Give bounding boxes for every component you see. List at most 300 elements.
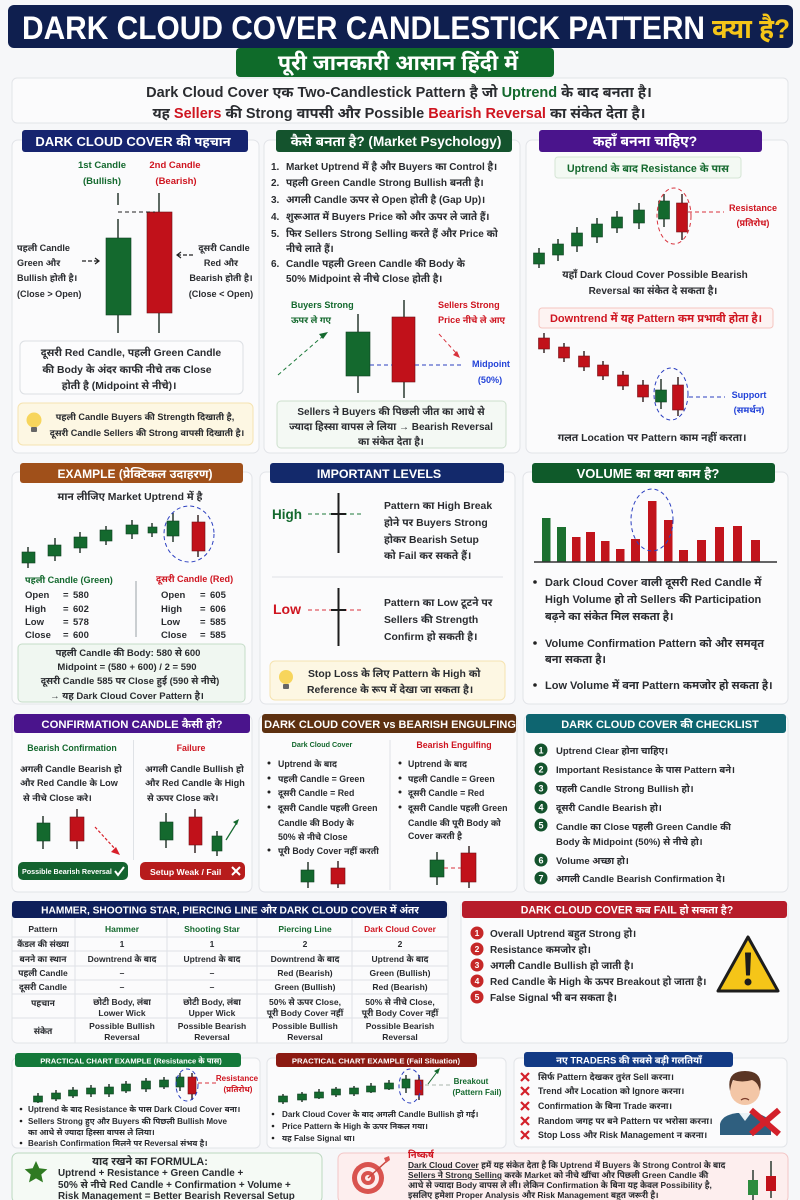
resistance label — [729, 203, 777, 228]
mistakes list: Stop Loss और Risk Management न करना। — [538, 1129, 707, 1140]
low level diagram — [273, 588, 363, 646]
heading: comparison table — [12, 901, 447, 918]
heading: trader mistakes: नए TRADERS की सबसे बड़ी गलतियाँ — [556, 1054, 703, 1066]
heading: practical example resistance — [15, 1053, 241, 1067]
breakout label — [453, 1077, 502, 1097]
heading: practical example fail: PRACTICAL CHART EXAMPLE (Fail Situation) — [292, 1056, 460, 1066]
panel: where it should form — [526, 130, 788, 453]
heading: identification — [22, 130, 248, 152]
table row: location: Downtrend के बाद — [88, 954, 157, 964]
conclusion text: इसलिए हमेशा Proper Analysis और Risk Management बहुत जरूरी है। — [408, 1190, 659, 1200]
chart: fail example candles — [278, 1068, 450, 1104]
table row: first candle: पहली Candle — [18, 968, 68, 978]
column: dark cloud cover: पूरी Body Cover नहीं करती — [278, 845, 379, 857]
column: bearish confirmation: और Red Candle के Low — [20, 776, 119, 788]
second candle values: दूसरी Candle (Red) — [156, 573, 233, 585]
column: dark cloud cover: 50% से नीचे Close — [278, 830, 348, 842]
conclusion text: निष्कर्ष — [408, 1149, 435, 1161]
second candle description: दूसरी Candle — [198, 242, 250, 254]
text: possible reversal: Reversal का संकेत दे सकता है। — [589, 284, 717, 297]
bullet list: Dark Cloud Cover के बाद अगली Candle Bullish हो गई। — [282, 1109, 478, 1119]
heading: where: कहाँ बनना चाहिए? — [593, 132, 697, 149]
failure reasons list: 5 — [475, 992, 480, 1002]
chart: uptrend into resistance — [534, 188, 724, 268]
heading: example: EXAMPLE (प्रेक्टिकल उदाहरण) — [57, 466, 213, 481]
checklist items: दूसरी Candle Bearish हो। — [556, 802, 662, 814]
first candle values: 580 — [73, 590, 89, 601]
candle labels — [78, 160, 201, 187]
subtitle banner — [236, 48, 554, 77]
volume bullet list: High Volume हो तो Sellers की Participation — [545, 593, 762, 606]
second candle description: (Close < Open) — [189, 289, 253, 299]
stop loss note: Stop Loss के लिए Pattern के High को — [308, 666, 481, 680]
volume bullet list — [533, 576, 773, 692]
table row: second candle: Red (Bearish) — [372, 982, 428, 992]
buyers label: ऊपर ले गए — [291, 313, 332, 325]
support label: (समर्थन) — [734, 404, 764, 415]
failure reasons list: 4 — [475, 976, 480, 986]
tip note — [18, 403, 253, 445]
table row: signal: Possible Bullish — [272, 1021, 338, 1031]
column: bearish engulfing — [398, 740, 507, 888]
high level text: होकर Bearish Setup — [384, 533, 479, 546]
breakout label: Breakout — [454, 1077, 489, 1086]
heading: market psychology — [276, 130, 512, 152]
bar chart: volume — [534, 489, 777, 562]
support label: Support — [732, 390, 766, 400]
second candle description — [189, 242, 253, 299]
conclusion text: Sellers ने Strong Selling करके Market को नीचे खींचा और पिछली Green Candle की — [408, 1170, 709, 1180]
conclusion text — [408, 1149, 726, 1200]
chart: resistance example candles — [34, 1069, 217, 1103]
numbered steps: 5. — [271, 229, 280, 240]
column: dark cloud cover: पहली Candle = Green — [278, 773, 365, 784]
table row: identification: पहचान — [31, 998, 56, 1008]
tip note: पहली Candle Buyers की Strength दिखाती है, — [56, 411, 234, 422]
table row: location: Uptrend के बाद — [372, 954, 429, 964]
first candle values: Close — [25, 630, 51, 641]
table row: identification: Upper Wick — [189, 1008, 236, 1018]
formula text — [58, 1154, 295, 1200]
icon: worried trader — [720, 1071, 779, 1135]
checklist items: Important Resistance के पास Pattern बने। — [556, 763, 735, 776]
column: failure — [140, 743, 245, 880]
intro text box: Dark Cloud Cover एक Two-Candlestick Pattern है जो Uptrend के बाद बनता है। — [146, 83, 652, 101]
first candle values: = — [63, 590, 69, 601]
column: bearish confirmation — [18, 743, 128, 880]
title: DARK CLOUD COVER CANDLESTICK PATTERN — [22, 10, 705, 46]
table row: identification: छोटी Body, लंबा — [183, 997, 241, 1007]
icon: bulb — [279, 670, 293, 689]
panel: conclusion — [338, 1149, 788, 1200]
column: dark cloud cover: Candle की Body के — [278, 816, 355, 828]
table row: first candle — [18, 968, 431, 978]
failure reasons list — [470, 926, 706, 1004]
low level diagram: Low — [273, 601, 301, 617]
table row: candle count: 1 — [210, 939, 215, 949]
bullet list: Bearish Confirmation मिलने पर Reversal संभव है। — [28, 1138, 207, 1148]
numbered steps: 1. — [271, 162, 280, 173]
callout: bearish reversal: ज्यादा हिस्सा वापस ले लिया → Bearish Reversal — [289, 420, 493, 433]
table row: second candle: – — [120, 982, 125, 992]
first candle description — [17, 242, 81, 299]
text: wrong location: गलत Location पर Pattern काम नहीं करता। — [558, 431, 746, 444]
checklist items: पहली Candle Strong Bullish हो। — [556, 783, 694, 795]
table header row — [28, 924, 437, 934]
column: bearish confirmation: अगली Candle Bearish हो — [20, 763, 122, 774]
first candle values: 578 — [73, 617, 89, 628]
failure reasons list: 3 — [475, 960, 480, 970]
panel: vs bearish engulfing — [259, 714, 517, 892]
resistance label: (प्रतिरोध) — [224, 1085, 253, 1094]
buyers label — [291, 300, 354, 325]
bullet list: Sellers Strong हुए और Buyers की पिछली Bullish Move — [28, 1116, 228, 1127]
heading: confirmation candle — [14, 714, 250, 733]
checklist items: 4 — [538, 802, 544, 812]
midpoint label: Midpoint — [472, 359, 510, 369]
panel: identification — [12, 130, 259, 453]
breakout label: (Pattern Fail) — [453, 1088, 502, 1097]
mistakes list: Random जगह पर बने Pattern पर भरोसा करना। — [538, 1114, 712, 1126]
first candle values: Low — [25, 617, 45, 628]
high level diagram — [272, 493, 363, 553]
second candle values: 606 — [210, 604, 226, 615]
low level text: Pattern का Low टूटने पर — [384, 595, 493, 610]
candle labels: (Bearish) — [155, 176, 197, 187]
failure reasons list: 2 — [475, 944, 480, 954]
heading: comparison table: HAMMER, SHOOTING STAR, PIERCING LINE और DARK CLOUD COVER में अंतर — [41, 904, 419, 916]
heading: example — [20, 463, 243, 483]
failure reasons list: Red Candle के High के ऊपर Breakout हो जाता है। — [490, 975, 706, 988]
badge: possible bearish reversal: Possible Bearish Reversal — [22, 867, 112, 876]
callout: close below midpoint: दूसरी Red Candle, पहली Green Candle — [41, 346, 221, 360]
sub-heading: uptrend resistance: Uptrend के बाद Resistance के पास — [567, 161, 729, 175]
panel: market psychology — [264, 130, 520, 453]
heading: volume — [532, 463, 775, 483]
table row: identification: 50% से नीचे Close, — [365, 997, 435, 1007]
panel: example — [12, 463, 252, 704]
second candle values: Low — [161, 617, 181, 628]
column: failure: अगली Candle Bullish हो — [145, 763, 244, 774]
failure reasons list: अगली Candle Bullish हो जाती है। — [490, 960, 634, 972]
callout: bearish reversal: Sellers ने Buyers की पिछली जीत का आधे से — [297, 405, 485, 418]
first candle values: = — [63, 604, 69, 615]
column: bearish engulfing: Uptrend के बाद — [408, 757, 468, 769]
second candle description: Red और — [204, 257, 239, 268]
column: failure: Failure — [177, 743, 206, 753]
chart: example candles — [22, 506, 214, 568]
column: bearish confirmation: Bearish Confirmation — [27, 743, 117, 753]
second candle description: Bearish होती है। — [189, 272, 253, 283]
panel: checklist — [524, 714, 788, 892]
chart: two candle diagram — [106, 193, 172, 333]
high level text: होने पर Buyers Strong — [384, 515, 488, 529]
heading: when it can fail — [462, 901, 787, 918]
first candle values: Open — [25, 590, 49, 601]
stop loss note: Reference के रूप में देखा जा सकता है। — [307, 682, 473, 696]
resistance label — [216, 1074, 259, 1094]
checklist items: 5 — [538, 820, 544, 830]
chart: downtrend into support — [538, 333, 725, 420]
icon: target — [352, 1156, 390, 1194]
column: bearish engulfing: Bearish Engulfing — [416, 740, 492, 750]
bullet list: Price Pattern के High के ऊपर निकल गया। — [282, 1122, 428, 1131]
table row: location: Downtrend के बाद — [271, 954, 340, 964]
column: dark cloud cover: Dark Cloud Cover — [292, 740, 353, 749]
icon: star — [25, 1161, 47, 1182]
first candle values: High — [25, 604, 46, 615]
column: bearish engulfing: Cover करती है — [408, 830, 463, 841]
chart: failure candles — [160, 809, 239, 856]
chart: bearish engulfing candles — [430, 846, 476, 888]
callout: close below midpoint: होती है (Midpoint से नीचे)। — [62, 378, 176, 392]
numbered steps: 3. — [271, 195, 280, 206]
numbered steps: 4. — [271, 212, 280, 223]
first candle values: पहली Candle (Green) — [25, 574, 113, 585]
table row: identification: 50% से ऊपर Close, — [269, 997, 341, 1007]
sub-heading: uptrend resistance — [555, 157, 741, 178]
bullet list — [20, 1105, 240, 1148]
table row: signal — [34, 1021, 434, 1042]
table row: second candle — [19, 982, 428, 993]
subtitle banner: पूरी जानकारी आसान हिंदी में — [278, 50, 519, 77]
table row: identification: Lower Wick — [98, 1008, 146, 1018]
table row: second candle: Green (Bullish) — [275, 982, 336, 992]
sellers label: Price नीचे ले आए — [438, 313, 506, 325]
second candle values: = — [200, 630, 206, 641]
second candle values: 605 — [210, 590, 227, 601]
text: possible reversal — [562, 268, 748, 297]
first candle description: पहली Candle — [17, 242, 70, 253]
chart: dark cloud cover candles — [301, 861, 345, 888]
table row: candle count: 2 — [303, 939, 308, 949]
numbered steps: Market Uptrend में है और Buyers का Control है। — [286, 161, 497, 173]
volume bullet list: बढ़ने का संकेत मिल सकता है। — [545, 609, 673, 623]
table row: candle count: कैंडल की संख्या — [17, 939, 69, 949]
first candle values: = — [63, 617, 69, 628]
table row: signal: Reversal — [287, 1032, 323, 1042]
checklist items: Candle का Close पहली Green Candle की — [556, 821, 731, 833]
numbered steps — [271, 161, 499, 285]
support label — [732, 390, 766, 415]
formula text: याद रखने का FORMULA: — [92, 1154, 208, 1168]
heading: identification: DARK CLOUD COVER की पहचान — [35, 134, 232, 149]
high level text: को Fail कर सकते हैं। — [384, 548, 471, 562]
panel: when it can fail — [461, 901, 788, 1043]
resistance label: Resistance — [729, 203, 777, 213]
heading: checklist — [526, 714, 786, 733]
table row: location — [19, 954, 429, 964]
low level text: Sellers की Strength — [384, 613, 478, 626]
table row: candle count: 2 — [398, 939, 403, 949]
arrow: buyers up — [278, 332, 328, 375]
bullet list: यह False Signal था। — [282, 1134, 355, 1143]
heading: practical example resistance: PRACTICAL CHART EXAMPLE (Resistance के पास) — [40, 1056, 222, 1066]
heading: trader mistakes — [524, 1052, 733, 1067]
conclusion text: Dark Cloud Cover हमें यह संकेत देता है कि Uptrend में Buyers के Strong Control के बाद — [408, 1160, 726, 1170]
table row: candle count — [17, 939, 403, 949]
table row: first candle: – — [210, 968, 215, 978]
resistance label: Resistance — [216, 1074, 259, 1083]
first candle values: = — [63, 630, 69, 641]
table row: identification: पूरी Body Cover नहीं — [362, 1008, 439, 1019]
heading: market psychology: कैसे बनता है? (Market Psychology) — [291, 132, 501, 149]
high level diagram: High — [272, 507, 302, 522]
numbered steps: Candle पहली Green Candle की Body के — [286, 257, 466, 270]
second candle values: 585 — [210, 617, 227, 628]
callout: close below midpoint: की Body के अंदर काफी नीचे तक Close — [42, 362, 212, 376]
numbered steps: पहली Green Candle Strong Bullish बनती है। — [286, 177, 484, 189]
heading: volume: VOLUME का क्या काम है? — [577, 466, 719, 481]
midpoint label: (50%) — [478, 375, 502, 385]
callout: midpoint calculation: पहली Candle की Body: 580 से 600 — [56, 646, 200, 659]
panel: comparison table — [12, 901, 448, 1043]
heading: vs bearish engulfing — [262, 714, 516, 733]
table row: first candle: – — [120, 968, 125, 978]
tip note: दूसरी Candle Sellers की Strong वापसी दिखाती है। — [50, 427, 244, 439]
callout: close below midpoint — [20, 341, 243, 394]
callout: midpoint calculation — [18, 644, 245, 702]
bullet list: Uptrend के बाद Resistance के पास Dark Cloud Cover बना। — [28, 1105, 240, 1114]
column: dark cloud cover — [268, 740, 379, 888]
numbered steps: अगली Candle ऊपर से Open होती है (Gap Up)। — [286, 193, 485, 206]
table row: location: Uptrend के बाद — [184, 954, 241, 964]
table header row: Dark Cloud Cover — [364, 924, 437, 934]
checklist items: Body के Midpoint (50%) से नीचे हो। — [556, 835, 703, 848]
table row: signal: Reversal — [104, 1032, 140, 1042]
formula text: 50% से नीचे Red Candle + Confirmation + Volume + — [58, 1178, 291, 1191]
table row: identification — [31, 997, 439, 1019]
table header row: Piercing Line — [278, 924, 332, 934]
table row: first candle: Red (Bearish) — [277, 968, 333, 978]
column: dark cloud cover: दूसरी Candle = Red — [278, 787, 354, 799]
first candle description: Green और — [17, 257, 61, 268]
volume bullet list: Dark Cloud Cover वाली दूसरी Red Candle में — [545, 576, 762, 590]
second candle values: Open — [161, 590, 185, 601]
checklist items — [534, 744, 735, 885]
table row: signal: Possible Bearish — [366, 1021, 434, 1031]
arrow: to green candle — [82, 258, 99, 264]
checklist items: Uptrend Clear होना चाहिए। — [556, 745, 668, 757]
high level text — [384, 501, 492, 562]
table row: signal: संकेत — [34, 1026, 53, 1036]
candle labels: (Bullish) — [83, 176, 121, 187]
panel: trader mistakes — [514, 1052, 787, 1147]
column: bearish engulfing: दूसरी Candle = Red — [408, 787, 484, 799]
text: assume uptrend: मान लीजिए Market Uptrend में है — [58, 490, 204, 503]
column: dark cloud cover: दूसरी Candle पहली Green — [278, 802, 377, 814]
numbered steps: शुरूआत में Buyers Price को और ऊपर ले जाते हैं। — [286, 210, 490, 223]
table row: location: बनने का स्थान — [19, 954, 67, 964]
arrow: sellers down — [439, 334, 460, 358]
low level text: Confirm हो सकती है। — [384, 630, 477, 643]
checklist items: Volume अच्छा हो। — [556, 855, 629, 867]
title: क्या है? — [712, 13, 790, 44]
failure reasons list: Resistance कमजोर हो। — [490, 944, 591, 956]
sellers label — [438, 300, 506, 325]
column: failure: से ऊपर Close करे। — [147, 791, 218, 803]
table row: signal: Possible Bullish — [89, 1021, 155, 1031]
numbered steps: फिर Sellers Strong Selling करते हैं और Price को — [286, 227, 499, 240]
first candle values: 602 — [73, 604, 89, 615]
mistakes list — [521, 1070, 712, 1140]
callout: midpoint calculation: दूसरी Candle 585 पर Close हुई (590 से नीचे) — [41, 674, 219, 688]
heading: important levels — [270, 463, 504, 483]
heading: checklist: DARK CLOUD COVER की CHECKLIST — [561, 718, 759, 731]
column: dark cloud cover: Uptrend के बाद — [278, 757, 338, 769]
column: bearish engulfing: पहली Candle = Green — [408, 773, 495, 784]
heading: where — [539, 130, 762, 152]
chart: market psychology candles — [346, 300, 464, 398]
second candle values: 585 — [210, 630, 227, 641]
mistakes list: सिर्फ Pattern देखकर तुरंत Sell करना। — [538, 1070, 674, 1083]
candle labels: 1st Candle — [78, 160, 126, 171]
stop loss note — [270, 661, 505, 700]
low level text — [384, 595, 493, 643]
column: bearish engulfing: Candle की पूरी Body को — [408, 817, 501, 829]
column: failure: और Red Candle के High — [145, 776, 245, 788]
panel: practical example resistance — [12, 1053, 260, 1148]
heading: confirmation candle: CONFIRMATION CANDLE कैसी हो? — [41, 718, 223, 731]
table row: candle count: 1 — [120, 939, 125, 949]
table header row: Hammer — [105, 924, 140, 934]
sellers label: Sellers Strong — [438, 300, 500, 310]
sub-heading: downtrend: Downtrend में यह Pattern कम प्रभावी होता है। — [550, 312, 762, 325]
table row: signal: Possible Bearish — [178, 1021, 246, 1031]
numbered steps: नीचे लाते हैं। — [286, 242, 334, 255]
conclusion text: आधे से ज्यादा Body वापस ले ली। लेकिन Confirmation के बिना यह केवल Possibility है, — [408, 1180, 712, 1190]
panel: volume — [523, 463, 788, 704]
second candle values: High — [161, 604, 182, 615]
numbered steps: 50% Midpoint से नीचे Close होती है। — [286, 272, 442, 285]
table row: signal: Reversal — [382, 1032, 418, 1042]
checklist items: 6 — [538, 856, 544, 866]
chart: bearish confirmation candles — [37, 809, 84, 849]
table row: second candle: दूसरी Candle — [19, 982, 67, 993]
mistakes list: Confirmation के बिना Trade करना। — [538, 1099, 672, 1111]
second candle values: Close — [161, 630, 187, 641]
table header row: Shooting Star — [184, 924, 241, 934]
first candle description: (Close > Open) — [17, 289, 81, 299]
checklist items: 7 — [538, 874, 544, 884]
callout: bearish reversal: का संकेत देता है। — [358, 435, 424, 448]
intro text box — [12, 78, 788, 123]
volume bullet list: बना सकता है। — [545, 653, 606, 666]
column: bearish engulfing: दूसरी Candle पहली Green — [408, 802, 507, 814]
heading: practical example fail — [276, 1053, 477, 1067]
arrow: to red candle — [177, 252, 193, 258]
badge: setup weak fail: Setup Weak / Fail — [150, 867, 221, 877]
resistance label: (प्रतिरोध) — [737, 217, 769, 228]
panel: confirmation candle — [12, 714, 252, 892]
mistakes list: Trend और Location को Ignore करना। — [538, 1085, 684, 1096]
second candle values — [156, 573, 233, 641]
first candle values — [25, 574, 113, 641]
bullet list — [272, 1109, 478, 1143]
failure reasons list: Overall Uptrend बहुत Strong हो। — [490, 928, 636, 941]
volume bullet list: Low Volume में वना Pattern कमजोर हो सकता है। — [545, 679, 773, 692]
checklist items: 2 — [538, 764, 544, 774]
formula text: Uptrend + Resistance + Green Candle + — [58, 1168, 243, 1179]
checklist items: 3 — [538, 784, 544, 794]
checklist items: अगली Candle Bearish Confirmation दे। — [556, 872, 725, 885]
table row: first candle: Green (Bullish) — [370, 968, 431, 978]
arrow: down — [95, 827, 120, 855]
midpoint label — [472, 359, 510, 385]
panel: important levels — [260, 463, 515, 704]
heading: vs bearish engulfing: DARK CLOUD COVER vs BEARISH ENGULFING — [264, 719, 516, 731]
table row: identification: पूरी Body Cover नहीं — [267, 1008, 344, 1019]
